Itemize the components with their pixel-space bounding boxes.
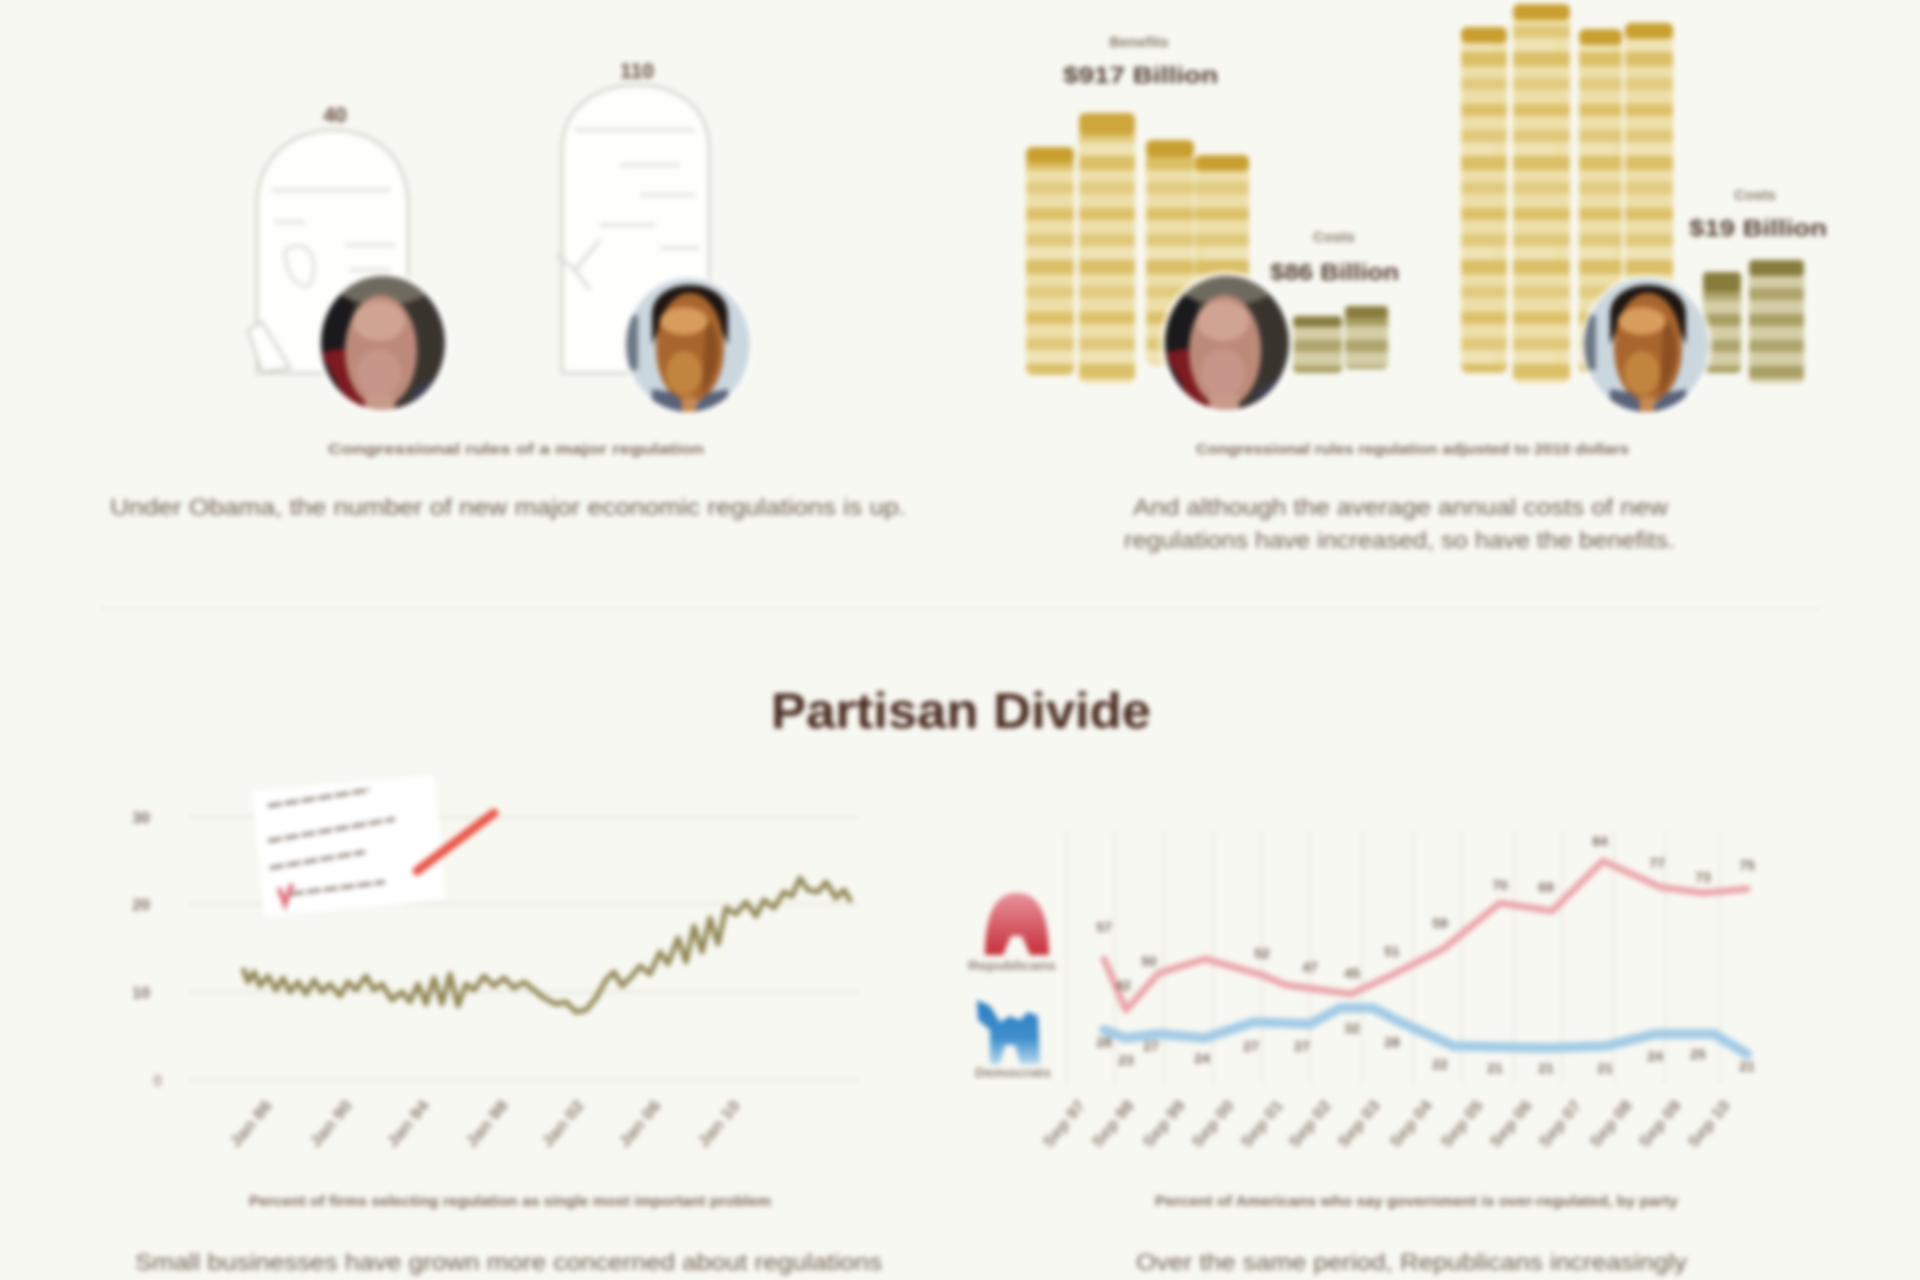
axis labels: dates: Jan 98 — [463, 1097, 512, 1151]
axis labels: years: Sep 09 — [1636, 1097, 1685, 1151]
axis labels: dates: Jan 90 — [307, 1097, 356, 1151]
panel: number of major regulations — [110, 60, 906, 520]
label: Bush costs: Costs — [1313, 229, 1355, 246]
axis labels: years: Sep 03 — [1335, 1097, 1384, 1151]
portrait: Obama — [618, 275, 758, 415]
values: Republicans: 57 — [1096, 919, 1112, 935]
caption: small firms: Percent of firms selecting regulation as single most important problem — [249, 1194, 771, 1210]
values: Republicans: 70 — [1492, 877, 1508, 893]
values: Democrats: 32 — [1344, 1020, 1360, 1036]
axis labels: years: Sep 02 — [1286, 1097, 1335, 1151]
axis labels: percent: 0 — [153, 1073, 162, 1090]
values: Republicans: 47 — [1302, 959, 1318, 975]
values: Republicans: 51 — [1384, 943, 1400, 959]
values: Democrats: 21 — [1597, 1060, 1613, 1076]
label: Bush costs: $86 Billion — [1270, 259, 1399, 285]
caption: party views: Percent of Americans who say government is over-regulated, by party — [1155, 1194, 1678, 1210]
axis labels: years: Sep 08 — [1587, 1097, 1636, 1151]
coin stacks: Bush benefits — [1026, 113, 1249, 383]
axis labels: years: Sep 99 — [1140, 1097, 1189, 1151]
coin stacks: Obama costs — [1703, 260, 1804, 383]
axis labels: percent: 10 — [132, 985, 150, 1002]
values: Democrats: 28 — [1384, 1034, 1400, 1050]
coin stacks: Bush costs — [1293, 306, 1388, 373]
axis labels: years: Sep 98 — [1089, 1097, 1138, 1151]
chart: small firms citing regulation — [132, 774, 882, 1275]
axis labels: percent: 30 — [132, 810, 150, 827]
axis labels: percent: 20 — [132, 897, 150, 914]
values: Republicans: 73 — [1695, 869, 1711, 885]
values: Democrats: 28 — [1096, 1034, 1112, 1050]
label: Bush costs — [1270, 229, 1399, 285]
values: Republicans: 45 — [1344, 965, 1360, 981]
axis labels: years: Sep 01 — [1238, 1097, 1287, 1151]
statement: Republicans: Over the same period, Republicans increasingly — [1136, 1249, 1688, 1275]
values: Democrats: 24 — [1194, 1050, 1210, 1066]
values: Democrats: 21 — [1538, 1060, 1554, 1076]
icon: Democratic donkey — [975, 1000, 1051, 1080]
axis labels: dates: Jan 94 — [384, 1097, 433, 1151]
values: Republicans — [1096, 833, 1755, 993]
line: Republicans — [1104, 861, 1747, 1010]
values: Republicans: 52 — [1254, 945, 1270, 961]
values: Democrats: 27 — [1243, 1038, 1259, 1054]
portrait: Obama — [1576, 275, 1716, 415]
values: Republicans: 50 — [1141, 953, 1157, 969]
panel: costs and benefits — [1026, 4, 1827, 553]
label: Obama costs: $19 Billion — [1689, 215, 1827, 241]
axis labels: years: Sep 97 — [1040, 1097, 1089, 1151]
values: Democrats: 23 — [1118, 1052, 1134, 1068]
values: Republicans: 77 — [1649, 855, 1665, 871]
heading: Partisan Divide: Partisan Divide — [771, 683, 1151, 739]
axis labels: dates: Jan 86 — [227, 1097, 276, 1151]
icon: checklist and pencil — [251, 774, 494, 918]
bottle icon: Obama regulations — [556, 85, 709, 373]
portrait: Bush — [316, 272, 449, 413]
values: Republicans: 69 — [1538, 879, 1554, 895]
line: Democrats — [1104, 1008, 1747, 1054]
axis labels: years: Sep 04 — [1387, 1097, 1436, 1151]
axis labels: years: Sep 06 — [1487, 1097, 1536, 1151]
caption: major rules count: Congressional rules of a major regulation — [328, 442, 704, 458]
axis labels: years — [1040, 1097, 1734, 1151]
values: Democrats: 27 — [1294, 1038, 1310, 1054]
axis labels: dates: Jan 10 — [695, 1097, 744, 1151]
statement: costs and benefits — [1124, 494, 1675, 553]
portrait: Bush — [1157, 265, 1297, 415]
icon: Republican elephant: Republicans — [968, 958, 1056, 973]
coin stacks: Obama benefits — [1461, 4, 1673, 383]
values: Democrats: 22 — [1432, 1056, 1448, 1072]
axis labels: years: Sep 07 — [1536, 1097, 1585, 1151]
label: Obama costs — [1689, 187, 1827, 241]
values: Democrats: 24 — [1647, 1048, 1663, 1064]
values: Republicans: 84 — [1592, 833, 1608, 849]
values: Democrats: 25 — [1690, 1046, 1706, 1062]
value: Bush count: 40 — [323, 104, 347, 127]
values: Republicans: 42 — [1115, 977, 1131, 993]
statement: rule count: Under Obama, the number of new major economic regulations is up. — [110, 494, 906, 520]
values: Democrats: 21 — [1739, 1058, 1755, 1074]
label: Bush benefits: Benefits — [1109, 34, 1169, 51]
statement: costs and benefits: And although the average annual costs of new — [1133, 494, 1668, 520]
icon: Democratic donkey: Democrats — [975, 1065, 1051, 1080]
value: Obama count: 110 — [620, 60, 654, 83]
label: Obama costs: Costs — [1734, 187, 1776, 204]
values: Democrats — [1096, 1020, 1755, 1076]
axis labels: dates: Jan 02 — [539, 1097, 588, 1151]
line: percent of firms — [243, 878, 851, 1012]
values: Democrats: 21 — [1487, 1060, 1503, 1076]
values: Democrats: 27 — [1143, 1038, 1159, 1054]
axis labels: dates — [227, 1097, 744, 1151]
label: Bush benefits — [1063, 34, 1218, 88]
values: Republicans: 75 — [1739, 857, 1755, 873]
label: Bush benefits: $917 Billion — [1063, 62, 1218, 88]
axis labels: years: Sep 05 — [1438, 1097, 1487, 1151]
axis labels: dates: Jan 06 — [616, 1097, 665, 1151]
statement: small businesses: Small businesses have grown more concerned about regulations — [135, 1249, 882, 1275]
axis labels: years: Sep 10 — [1685, 1097, 1734, 1151]
statement: costs and benefits: regulations have increased, so have the benefits. — [1124, 527, 1675, 553]
bottle icon: Bush regulations — [248, 130, 408, 373]
axis labels: years: Sep 00 — [1189, 1097, 1238, 1151]
values: Republicans: 59 — [1432, 915, 1448, 931]
chart: Americans saying over-regulated by party — [968, 831, 1755, 1275]
caption: costs and benefits: Congressional rules regulation adjusted to 2010 dollars — [1196, 442, 1629, 458]
icon: Republican elephant — [968, 893, 1056, 973]
axis labels: percent — [132, 810, 162, 1090]
